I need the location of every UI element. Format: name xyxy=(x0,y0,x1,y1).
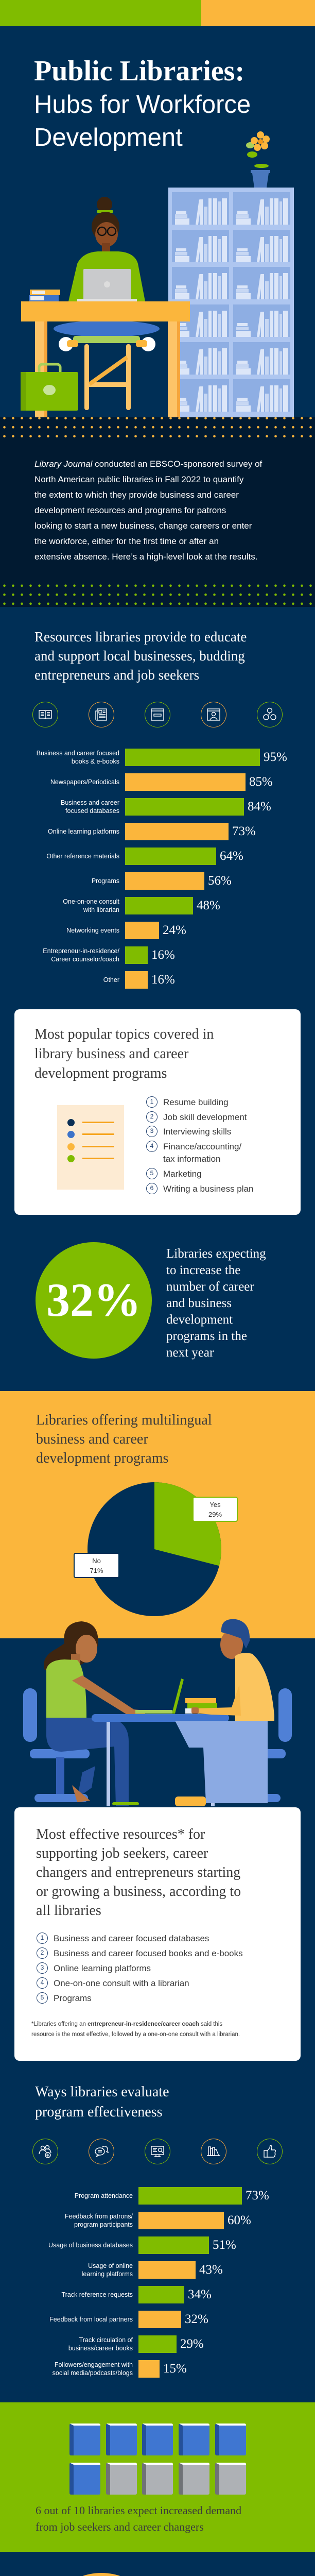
briefcase xyxy=(21,364,78,411)
icon: list document xyxy=(57,1105,124,1190)
panel: demand section xyxy=(0,2402,315,2552)
bar chart: evaluation methods: Usage of online xyxy=(88,2262,133,2269)
title xyxy=(34,55,251,151)
list: effective resources: 3 xyxy=(41,1964,44,1971)
bar chart: resources: 16% xyxy=(151,948,175,962)
list: effective resources: Online learning platforms xyxy=(54,1963,151,1973)
heading: popular topics: Most popular topics covered in xyxy=(34,1026,214,1042)
bar chart: resources: Networking events xyxy=(66,927,119,934)
icon: book xyxy=(32,702,58,727)
list: topics: Marketing xyxy=(163,1169,202,1179)
panel: multilingual section xyxy=(0,1391,315,1638)
heading: resources: and support local businesses, budding xyxy=(34,648,245,664)
icon: books on shelf xyxy=(201,2139,226,2164)
bar chart: resources: 95% xyxy=(264,750,287,764)
bar chart: evaluation methods xyxy=(48,2187,269,2378)
bar chart: evaluation methods: social media/podcasts/blogs xyxy=(52,2369,133,2377)
heading: most effective: supporting job seekers, career xyxy=(36,1845,208,1861)
stat text: 32%: next year xyxy=(166,1346,214,1360)
intro paragraph xyxy=(34,459,262,562)
bar chart: evaluation methods: 29% xyxy=(180,2337,204,2351)
bookshelf xyxy=(168,188,294,418)
bar chart: evaluation methods: Followers/engagement with xyxy=(55,2361,133,2368)
woman xyxy=(68,197,145,302)
heading: multilingual: Libraries offering multilingual xyxy=(36,1412,212,1428)
table xyxy=(92,1679,229,1806)
heading: most effective xyxy=(36,1826,241,1919)
list: effective resources: Business and career focused books and e-books xyxy=(54,1948,243,1958)
list: topics: Interviewing skills xyxy=(163,1127,231,1137)
bar chart: evaluation methods: Feedback from local partners xyxy=(49,2316,133,2323)
chairs xyxy=(23,1688,292,1802)
bar chart: evaluation methods: 51% xyxy=(213,2238,236,2252)
bar chart: evaluation methods: 15% xyxy=(163,2362,187,2376)
stat: 32% circle xyxy=(36,1242,152,1359)
bar chart: resources: Business and career xyxy=(61,799,119,806)
stat: 84% circle xyxy=(43,2573,160,2576)
heading: popular topics xyxy=(34,1026,214,1081)
callout: no 71% xyxy=(74,1553,119,1578)
bar chart: resources: books & e-books xyxy=(72,758,119,765)
panel: popular topics card xyxy=(14,1009,301,1215)
bar chart: evaluation methods: Program attendance xyxy=(75,2192,133,2199)
panel: most effective resources card xyxy=(14,1807,301,2061)
bar chart: resources: 64% xyxy=(220,849,243,863)
icon: thumbs up xyxy=(257,2139,283,2164)
bar chart: resources: 24% xyxy=(163,923,186,937)
bar chart: evaluation methods: program participants xyxy=(74,2221,133,2228)
top color bars xyxy=(0,0,315,26)
demand text: from job seekers and career changers xyxy=(36,2520,204,2533)
flower pot xyxy=(246,131,270,188)
icon: profile window xyxy=(201,702,226,727)
heading: popular topics: development programs xyxy=(34,1065,167,1081)
bar chart: resources: 48% xyxy=(197,899,220,912)
list: effective resources: One-on-one consult with a librarian xyxy=(54,1978,189,1988)
icon: people plus xyxy=(32,2139,58,2164)
list: topics: Writing a business plan xyxy=(163,1184,253,1194)
stat text: 32%: number of career xyxy=(166,1280,254,1294)
bar chart: evaluation methods: 32% xyxy=(185,2312,208,2326)
list: effective resources: 4 xyxy=(41,1979,44,1986)
intro paragraph: looking to start a new business, change careers or enter xyxy=(34,521,252,531)
bar chart: evaluation methods: Track reference requests xyxy=(62,2291,133,2298)
heading: resources: Resources libraries provide to educate xyxy=(34,629,247,645)
title: Development xyxy=(34,124,183,151)
heading: multilingual: business and career xyxy=(36,1431,148,1447)
intro band (dark) xyxy=(0,417,315,607)
demand text: 6 out of 10 libraries expect increased demand xyxy=(36,2504,241,2517)
bar chart: resources: Other xyxy=(103,976,119,984)
stat text: 32%: to increase the xyxy=(166,1263,240,1277)
stat text: 32%: Libraries expecting xyxy=(166,1247,266,1261)
icon grid: 6 of 10 books xyxy=(69,2424,246,2495)
list: effective resources: 1 xyxy=(41,1934,44,1941)
bar chart: evaluation methods: Feedback from patrons/ xyxy=(65,2213,133,2220)
bar chart: resources: Business and career focused xyxy=(37,750,119,757)
list: topics xyxy=(146,1096,253,1194)
list: topics: 3 xyxy=(150,1127,153,1134)
intro paragraph: North American public libraries in Fall 2022 to quantify xyxy=(34,474,243,484)
footnote: resource is the most effective, followed by a one-on-one consult with a librarian. xyxy=(31,2031,240,2038)
icon: network people xyxy=(257,702,283,727)
title: Hubs for Workforce xyxy=(34,91,251,118)
icon: browser xyxy=(145,702,170,727)
stat text: 32%: programs in the xyxy=(166,1329,247,1343)
list: effective resources: Business and career focused databases xyxy=(54,1934,209,1943)
list: topics: 1 xyxy=(150,1098,153,1105)
bar chart: evaluation methods: 60% xyxy=(227,2213,251,2227)
icon: monitor search xyxy=(145,2139,170,2164)
callout: yes 29%: 29% xyxy=(208,1511,222,1518)
heading: ways libraries evaluate: program effectiveness xyxy=(35,2104,163,2120)
list: topics: Job skill development xyxy=(163,1112,247,1122)
list: topics: 4 xyxy=(150,1142,153,1149)
woman xyxy=(44,1621,145,1806)
bar chart: evaluation methods: 34% xyxy=(188,2287,212,2301)
intro paragraph: the extent to which they provide business and career xyxy=(34,490,239,500)
icon: speech bubbles xyxy=(89,2139,114,2164)
list: topics: tax information xyxy=(163,1154,220,1164)
list: topics: 6 xyxy=(150,1184,153,1192)
resource icons row xyxy=(32,702,283,727)
heading: most effective: Most effective resources* for xyxy=(36,1826,205,1842)
bar chart: resources: focused databases xyxy=(65,807,119,815)
bar chart: resources xyxy=(37,749,287,989)
list: topics: 5 xyxy=(150,1170,153,1177)
bar chart: evaluation methods: Usage of business databases xyxy=(48,2242,133,2249)
list: topics: 2 xyxy=(150,1113,153,1120)
list: topics: Finance/accounting/ xyxy=(163,1142,241,1151)
bar chart: resources: 84% xyxy=(248,800,271,814)
intro paragraph: extensive absence. Here’s a high-level look at the results. xyxy=(34,552,257,562)
callout: yes 29%: Yes xyxy=(209,1501,221,1509)
bar chart: resources: 73% xyxy=(232,824,256,838)
bar chart: resources: Programs xyxy=(92,877,119,885)
title: Public Libraries: xyxy=(34,55,244,87)
bar chart: evaluation methods: learning platforms xyxy=(82,2270,133,2278)
hero illustration: woman at desk with bookshelf xyxy=(21,131,294,417)
callout: no 71%: 71% xyxy=(90,1567,103,1574)
list: topics: Resume building xyxy=(163,1097,229,1107)
footnote: *Libraries offering an entrepreneur-in-residence/career coach said this xyxy=(31,2021,222,2027)
heading: most effective: changers and entrepreneurs starting xyxy=(36,1865,240,1880)
heading: resources: entrepreneurs and job seekers xyxy=(34,667,199,683)
bar chart: resources: Newspapers/Periodicals xyxy=(50,778,119,786)
heading: most effective: all libraries xyxy=(36,1903,101,1919)
illustration: two people at table xyxy=(23,1619,292,1806)
intro paragraph: development resources and programs for patrons xyxy=(34,505,226,515)
heading: most effective: or growing a business, according to xyxy=(36,1884,241,1900)
list: effective resources: Programs xyxy=(54,1993,92,2003)
bar chart: resources: Career counselor/coach xyxy=(51,956,119,963)
bar chart: resources: with librarian xyxy=(83,906,119,913)
bar chart: resources: Online learning platforms xyxy=(48,828,119,835)
icon: newspaper xyxy=(89,702,114,727)
bar chart: resources: 56% xyxy=(208,874,232,888)
callout: no 71%: No xyxy=(92,1557,101,1565)
bar chart: evaluation methods: business/career books xyxy=(68,2345,133,2352)
bar chart: evaluation methods: 73% xyxy=(246,2189,269,2202)
man xyxy=(175,1619,274,1806)
heading: ways libraries evaluate xyxy=(35,2084,169,2120)
evaluation icons row xyxy=(32,2139,283,2164)
heading: popular topics: library business and career xyxy=(34,1046,188,1062)
stat text: 32% xyxy=(166,1247,266,1360)
pie chart: multilingual xyxy=(87,1482,221,1616)
list: effective resources xyxy=(37,1933,243,2004)
stat text: 32%: development xyxy=(166,1313,233,1327)
stat: 32% circle: 32% xyxy=(46,1274,141,1326)
desk xyxy=(21,290,190,418)
intro paragraph: the workforce, either for the first time or after an xyxy=(34,536,219,546)
bar chart: resources: Entrepreneur-in-residence/ xyxy=(43,947,119,955)
heading: resources xyxy=(34,629,247,683)
bar chart: resources: 16% xyxy=(151,973,175,987)
bar chart: evaluation methods: 43% xyxy=(199,2263,223,2277)
intro paragraph: Library Journal conducted an EBSCO-sponsored survey of xyxy=(34,459,262,469)
list: effective resources: 5 xyxy=(41,1994,44,2001)
list: effective resources: 2 xyxy=(41,1949,44,1956)
bar chart: resources: One-on-one consult xyxy=(63,898,119,905)
heading: multilingual: development programs xyxy=(36,1450,168,1466)
footnote xyxy=(31,2021,240,2038)
bar chart: resources: 85% xyxy=(249,775,273,789)
stat text: 32%: and business xyxy=(166,1296,232,1310)
demand text xyxy=(36,2504,241,2533)
bar chart: resources: Other reference materials xyxy=(46,853,119,860)
heading: ways libraries evaluate: Ways libraries evaluate xyxy=(35,2084,169,2100)
heading: multilingual xyxy=(36,1412,212,1466)
callout: yes 29% xyxy=(192,1497,238,1522)
bar chart: evaluation methods: Track circulation of xyxy=(79,2336,133,2344)
